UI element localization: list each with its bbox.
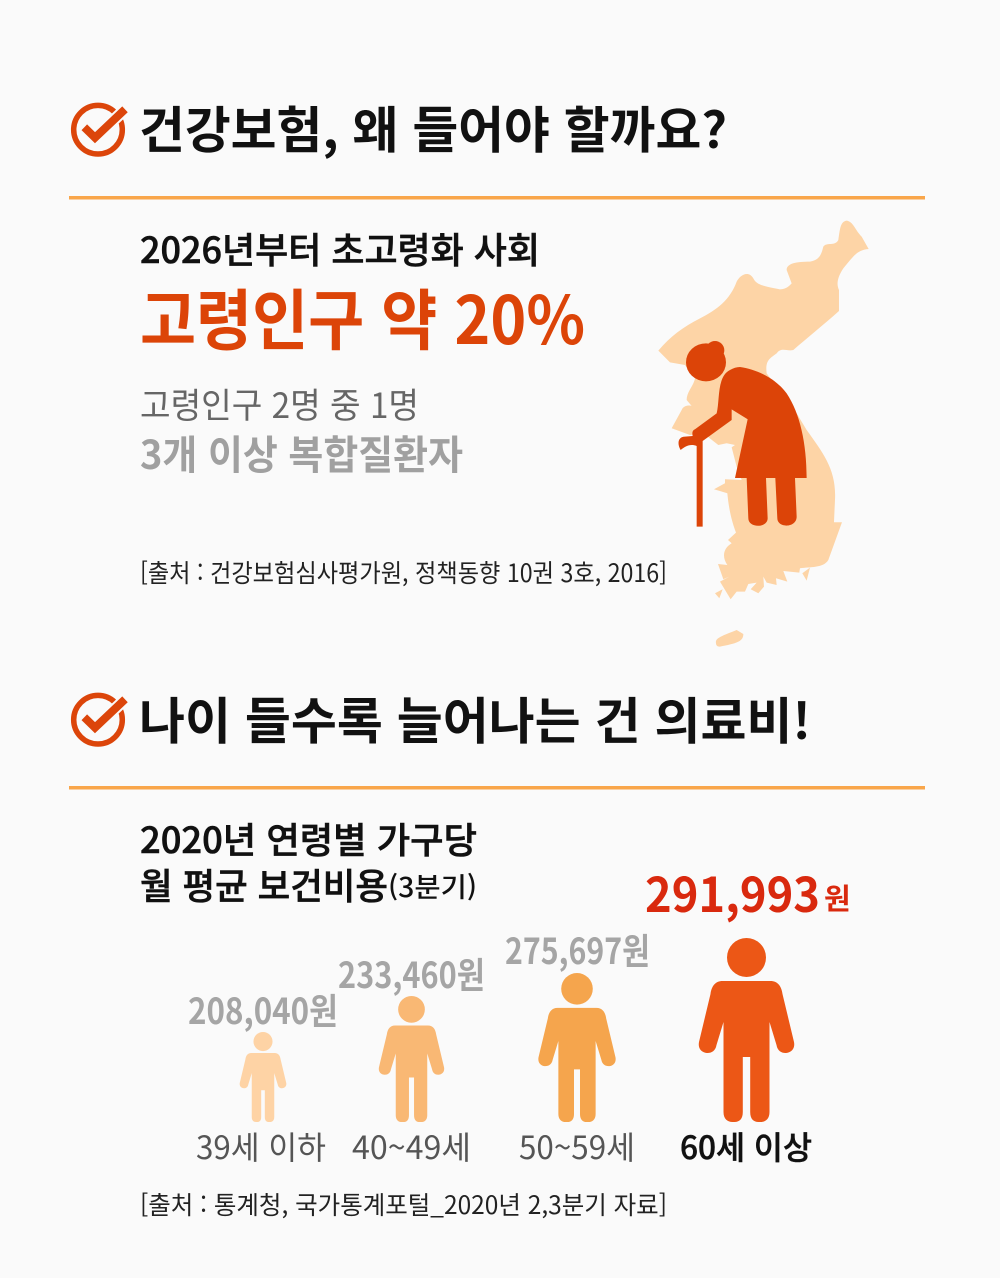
big stat: elderly population 20%: 고령인구 약 20%: [140, 268, 585, 364]
group: 40 to 49: [338, 947, 485, 1169]
heading: medical costs grow with age: 나이 들수록 늘어나는 건 의료비!: [139, 682, 811, 754]
panel: medical costs by age: [69, 682, 925, 1222]
group: 60 and over: 원: [824, 876, 851, 918]
icon: check mark 2: [74, 695, 125, 744]
group: 40 to 49: 40~49세: [352, 1123, 471, 1169]
panel: why health insurance: [69, 91, 925, 647]
group: 60 and over: [645, 856, 851, 1169]
pictogram chart: [188, 856, 851, 1169]
group: 50 to 59: 50~59세: [519, 1123, 635, 1169]
chart title line 2: 월 평균 보건비용: [140, 858, 388, 910]
group: 39 and under: 208,040원: [188, 983, 338, 1035]
group: 60 and over: 291,993: [645, 856, 820, 926]
group: 50 to 59: 275,697원: [505, 923, 650, 975]
group: 60 and over: 60세 이상: [680, 1123, 812, 1169]
group: 39 and under: [188, 983, 338, 1169]
map with elderly figure: [658, 221, 869, 647]
subheading: super-aged society: 2026년부터 초고령화 사회: [140, 222, 540, 274]
text: one in two elderly: 고령인구 2명 중 1명: [140, 378, 419, 429]
source 2: [출처 : 통계청, 국가통계포털_2020년 2,3분기 자료]: [140, 1186, 667, 1222]
icon: check mark 1: [74, 105, 125, 154]
group: 50 to 59: [505, 923, 650, 1169]
group: 40 to 49: 233,460원: [338, 947, 485, 999]
heading: why insurance: 건강보험, 왜 들어야 할까요?: [139, 91, 727, 163]
chart title line 1: 2020년 연령별 가구당: [140, 812, 477, 864]
group: 39 and under: 39세 이하: [196, 1123, 326, 1169]
map of Korea: [658, 221, 869, 647]
text: complex disease patients: 3개 이상 복합질환자: [140, 423, 463, 481]
source 1: [출처 : 건강보험심사평가원, 정책동향 10권 3호, 2016]: [140, 554, 667, 590]
icon: elderly woman with cane: [679, 341, 807, 527]
chart title line 2: (3분기): [388, 866, 477, 905]
